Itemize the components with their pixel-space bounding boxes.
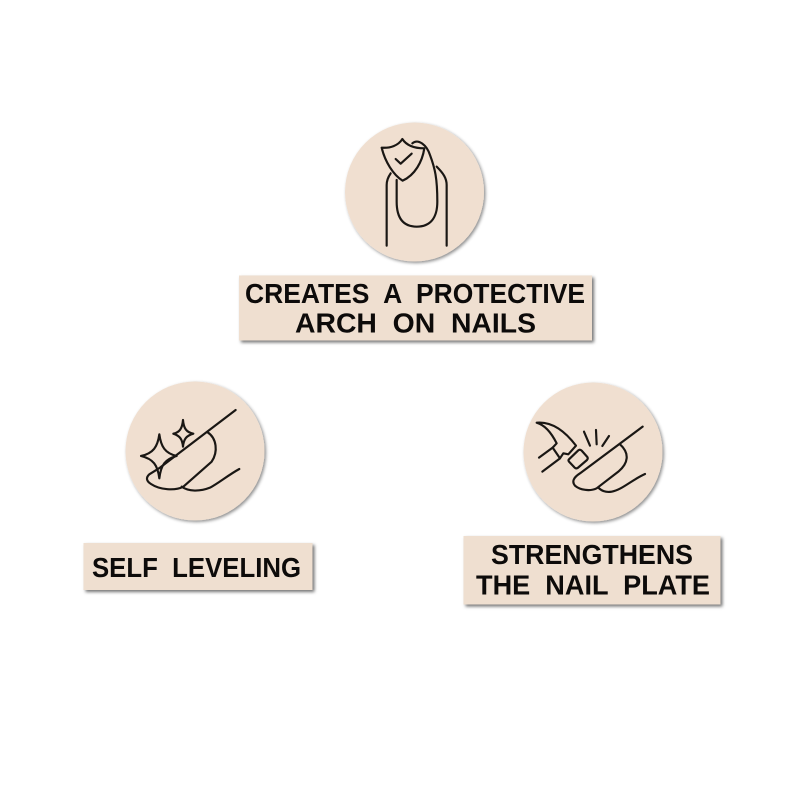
panel: strengthens: [464, 382, 720, 604]
label: self leveling: [84, 543, 312, 590]
circle badge: self leveling: [126, 382, 264, 520]
label: creates a protective arch on nails: [239, 276, 592, 340]
label: strengthens the nail plate: STRENGTHENS: [491, 539, 693, 570]
label: strengthens the nail plate: [464, 536, 720, 604]
panel: self leveling: [84, 382, 312, 590]
circle badge: strengthens: [524, 382, 662, 522]
icon: hammer hitting nail: [537, 423, 645, 492]
label: strengthens the nail plate: THE NAIL PLATE: [476, 570, 710, 600]
circle badge: protective arch: [345, 122, 484, 262]
icon: nail with sparkles: [141, 410, 239, 491]
label: self leveling: SELF LEVELING: [92, 552, 301, 583]
label: creates a protective arch on nails: ARCH ON NAILS: [295, 308, 536, 338]
panel: protective arch: [239, 122, 592, 340]
icon: finger with shield: [382, 139, 447, 246]
label: creates a protective arch on nails: CREATES A PROTECTIVE: [245, 278, 585, 309]
